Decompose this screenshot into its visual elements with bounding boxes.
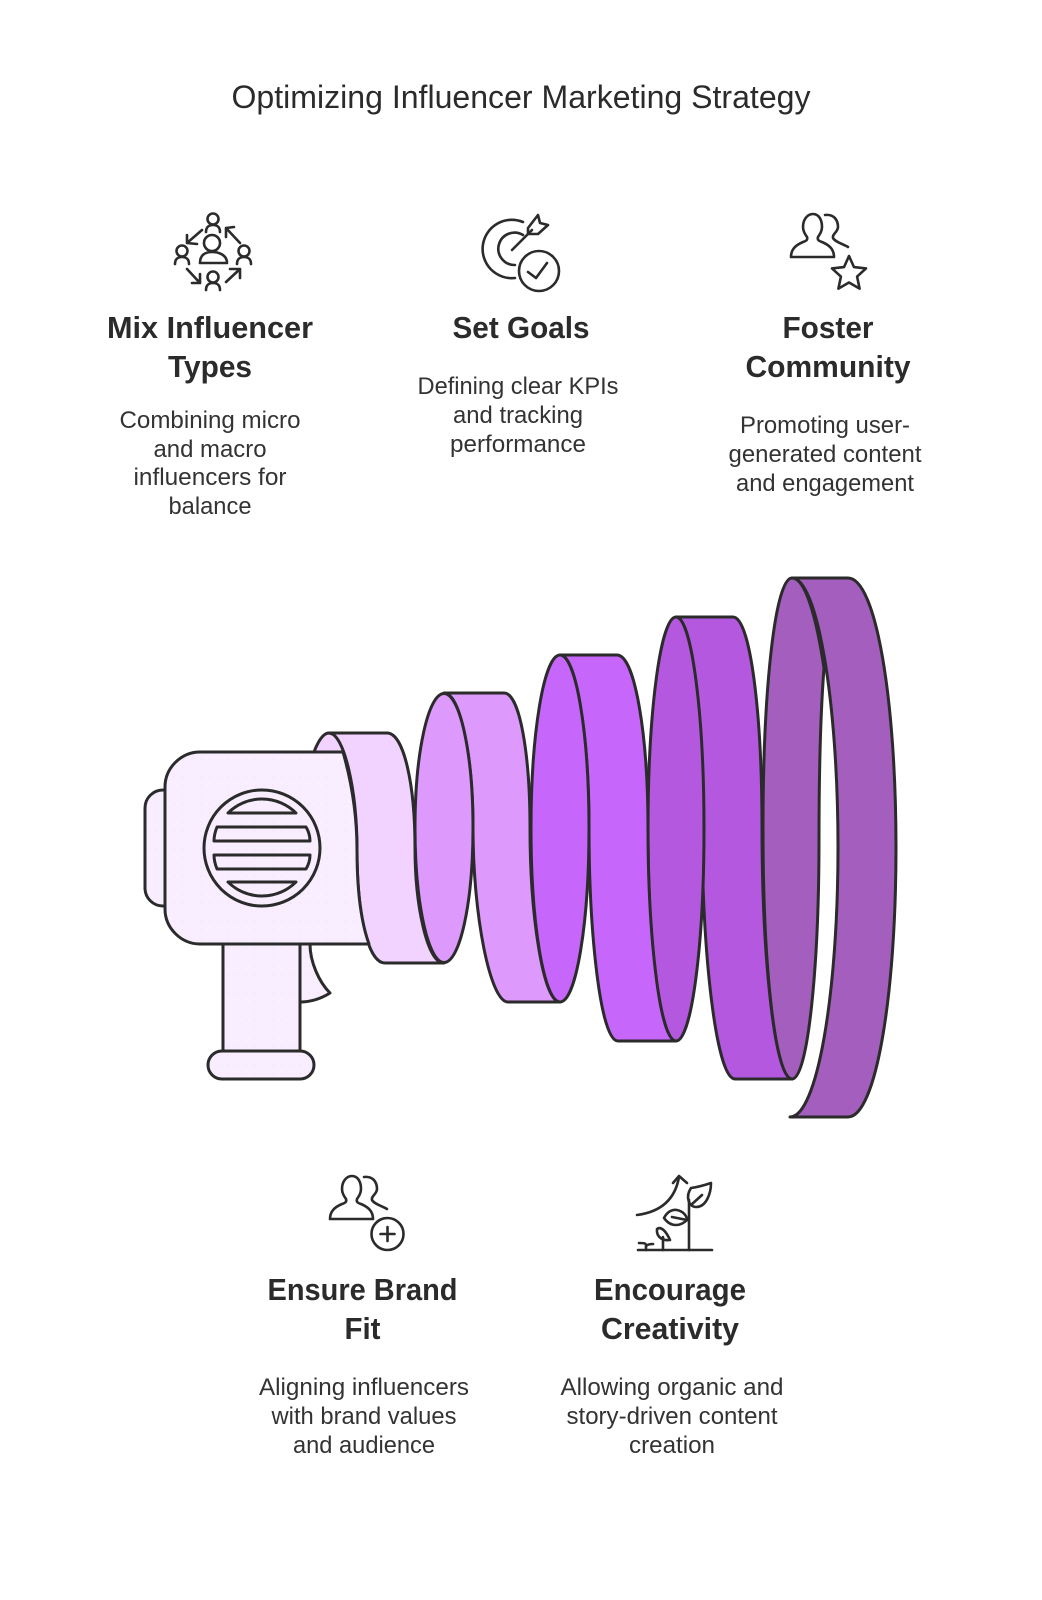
description: Set Goals <box>418 373 618 458</box>
trigger <box>300 944 330 1002</box>
description: Set Goals: performance <box>450 431 586 458</box>
back cap of gun <box>145 790 165 906</box>
panel: Ensure Brand Fit <box>259 1176 469 1459</box>
gun body <box>165 752 369 944</box>
heading: Encourage Creativity: Encourage <box>594 1272 746 1307</box>
icon: two people with star <box>791 214 866 289</box>
title: Optimizing Influencer Marketing Strategy <box>232 79 810 115</box>
speaker grille <box>204 790 320 906</box>
ring 3 face <box>531 655 589 1002</box>
icon: circle of people with arrows <box>175 214 251 290</box>
icon: two people with plus <box>330 1176 404 1250</box>
panel: Foster Community <box>728 214 922 497</box>
description: Encourage Creativity: Allowing organic and <box>560 1374 784 1401</box>
panel: Set Goals <box>418 215 618 458</box>
description: Encourage Creativity: creation <box>629 1432 715 1459</box>
handle base <box>208 1051 314 1079</box>
description: Ensure Brand Fit: and audience <box>293 1432 435 1459</box>
icon: growing plant with rising arrow <box>637 1176 712 1250</box>
heading: Ensure Brand Fit <box>268 1272 458 1346</box>
description: Foster Community: Promoting user- <box>740 412 910 439</box>
heading: Encourage Creativity <box>594 1272 746 1346</box>
description: Encourage Creativity: story-driven content <box>566 1403 778 1430</box>
heading: Set Goals: Set Goals <box>452 310 590 345</box>
description: Set Goals: Defining clear KPIs <box>418 373 618 400</box>
heading: Foster Community: Community <box>746 349 911 384</box>
description: Mix Influencer Types <box>120 407 300 520</box>
description: Ensure Brand Fit: Aligning influencers <box>259 1374 469 1401</box>
description: Ensure Brand Fit: with brand values <box>271 1403 456 1430</box>
ring 4 face <box>648 617 704 1041</box>
description: Mix Influencer Types: Combining micro <box>120 407 300 434</box>
description: Foster Community: generated content <box>728 441 922 468</box>
description: Encourage Creativity <box>560 1374 784 1459</box>
ring 5 band <box>790 578 896 1117</box>
panel: Mix Influencer Types <box>107 214 313 520</box>
description: Mix Influencer Types: balance <box>168 493 252 520</box>
description: Ensure Brand Fit <box>259 1374 469 1459</box>
description: Foster Community: and engagement <box>736 470 914 497</box>
description: Foster Community <box>728 412 922 497</box>
heading: Mix Influencer Types: Mix Influencer <box>107 310 313 345</box>
heading: Mix Influencer Types: Types <box>168 349 252 384</box>
heading: Encourage Creativity: Creativity <box>601 1311 740 1346</box>
ring 1 face <box>300 733 375 848</box>
panel: Encourage Creativity <box>560 1176 784 1459</box>
heading: Ensure Brand Fit: Ensure Brand <box>268 1272 458 1307</box>
heading: Ensure Brand Fit: Fit <box>344 1311 380 1346</box>
ring 3 band <box>560 655 676 1041</box>
ring 2 face <box>415 694 473 962</box>
ring 2 band <box>444 693 560 1002</box>
description: Mix Influencer Types: influencers for <box>134 464 286 491</box>
ring 1 band <box>329 733 444 963</box>
megaphone illustration <box>145 578 896 1117</box>
description: Set Goals: and tracking <box>453 402 583 429</box>
description: Mix Influencer Types: and macro <box>154 436 266 463</box>
handle <box>223 944 300 1051</box>
heading: Foster Community: Foster <box>782 310 874 345</box>
heading: Foster Community <box>746 310 911 384</box>
icon: target with arrow and check <box>483 215 559 291</box>
ring 4 band <box>676 617 792 1079</box>
ring 5 face <box>763 578 824 1079</box>
heading: Mix Influencer Types <box>107 310 313 384</box>
